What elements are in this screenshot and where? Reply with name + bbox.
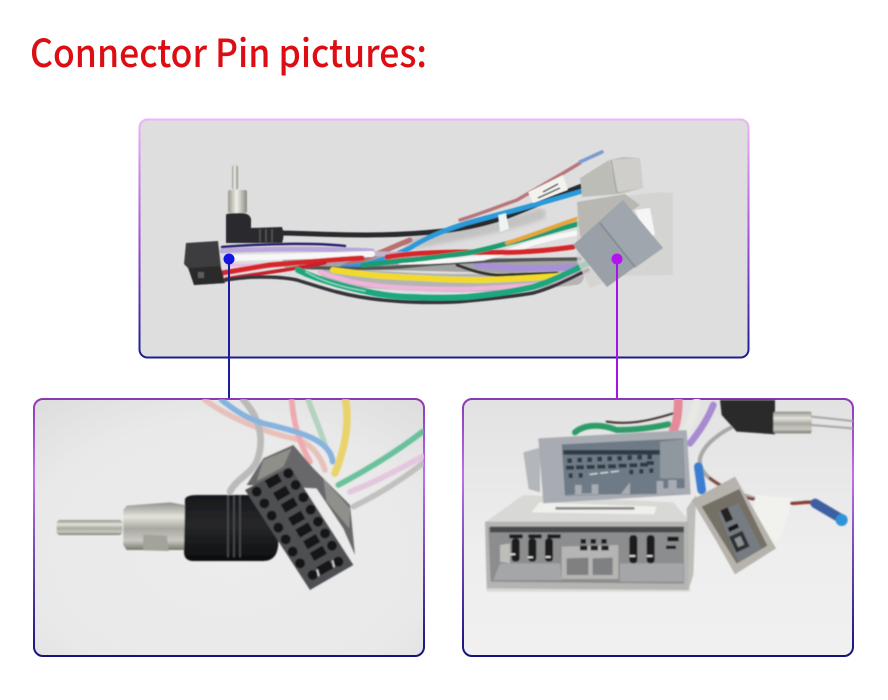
lower connector — [485, 522, 688, 590]
small connector top right — [580, 157, 643, 197]
elbow ribs — [260, 229, 272, 242]
black wire by purple — [457, 265, 557, 275]
panel: full wiring harness — [140, 120, 748, 358]
brown wire and blue tip — [792, 502, 815, 503]
antenna elbow — [226, 213, 284, 243]
lower connector terminals — [509, 534, 679, 563]
connector line: right callout — [616, 259, 618, 399]
pink wire at plug — [228, 264, 285, 265]
plug side gray — [247, 445, 355, 555]
pin glints — [317, 561, 334, 576]
lavender and purple wires — [222, 249, 372, 251]
upper connector keys — [565, 480, 685, 497]
white label — [532, 502, 657, 514]
antenna pin — [57, 520, 122, 535]
small connector — [692, 477, 776, 574]
antenna pin — [232, 165, 238, 190]
main gray connector block — [573, 192, 673, 288]
label on wire — [528, 175, 568, 203]
wires behind connectors — [575, 424, 668, 432]
panel: vehicle connectors close-up — [463, 399, 853, 656]
black plug housing — [184, 241, 225, 285]
blue marker dot — [224, 254, 234, 264]
connectors photo drawing — [485, 400, 853, 592]
pink wire — [320, 272, 588, 289]
antenna ferrule — [123, 502, 185, 550]
antenna ferrule — [228, 190, 247, 213]
plug holes — [252, 468, 343, 580]
blue wire — [343, 191, 582, 267]
purple marker dot — [612, 254, 622, 264]
green wire upper — [363, 223, 582, 265]
upper connector — [523, 448, 540, 492]
dark wire upper — [300, 259, 580, 268]
antenna blur top right — [720, 400, 775, 434]
dusty red wire — [347, 240, 410, 265]
white wire — [228, 254, 372, 258]
left plug with antenna — [184, 165, 284, 285]
harness wires — [222, 152, 602, 302]
title: Connector Pin pictures: — [30, 23, 427, 79]
back box of lower connector — [486, 495, 690, 592]
close-up photo drawing — [57, 400, 423, 590]
black antenna body — [184, 495, 278, 561]
red wires — [222, 258, 362, 273]
plug face — [245, 467, 353, 590]
orange wire — [507, 217, 582, 243]
upper connector pins — [563, 450, 660, 478]
gray sleeves between wires — [290, 262, 575, 268]
connector line: left callout — [228, 259, 230, 399]
faded wires — [205, 400, 423, 507]
yellow wire — [333, 270, 568, 280]
antenna cable — [283, 186, 582, 235]
black wire lower — [225, 270, 588, 302]
label on small connector wire — [754, 498, 794, 506]
green wire lower — [298, 263, 588, 298]
panel: antenna and plug close-up — [34, 399, 424, 656]
blue tip — [580, 152, 602, 162]
cable tie — [498, 213, 509, 232]
